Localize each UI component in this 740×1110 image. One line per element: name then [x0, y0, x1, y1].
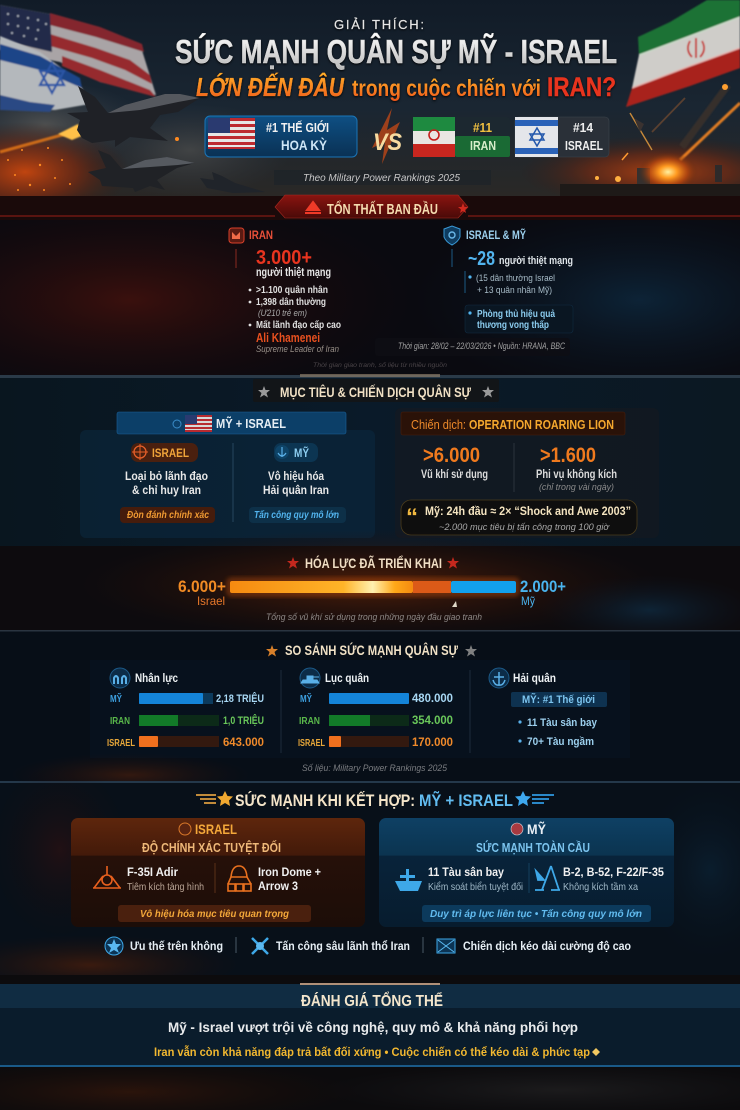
- column: Israel and US losses: (15 dân thường Israel: [476, 273, 555, 284]
- panel: navy: MỸ: #1 Thế giới: [522, 693, 595, 706]
- panel: Israel precision: ĐỘ CHÍNH XÁC TUYỆT ĐỐI: [142, 840, 281, 855]
- panel: firepower deployed: [0, 530, 740, 645]
- panel: Israel precision: Arrow 3: [258, 879, 298, 893]
- badge: Iran ranking: #11: [473, 120, 492, 135]
- column: Israel and US losses: thương vong thấp: [477, 319, 549, 331]
- caption: Số liệu: Military Power Rankings 2025: [302, 763, 448, 774]
- icon: aircraft carrier: [395, 869, 422, 891]
- column: Israel and US losses: ~28: [468, 248, 495, 270]
- panel: Israel precision: [71, 818, 365, 927]
- icon: missiles and explosion: [560, 84, 740, 196]
- heading with wings: [196, 790, 554, 810]
- heading: HÓA LỰC ĐÃ TRIỂN KHAI: [305, 556, 442, 571]
- icon: VS spark: VS: [373, 129, 402, 156]
- chart: manpower: IRAN: [110, 716, 130, 727]
- bar chart: firepower: 2.000+: [520, 577, 566, 596]
- badge: Iran ranking: [412, 117, 510, 157]
- bar chart: firepower: [178, 577, 566, 608]
- badge: Israel ranking: [515, 117, 609, 157]
- icon: fighter jet small: [200, 172, 265, 193]
- chart: ground forces: IRAN: [299, 716, 320, 727]
- callout: Shock and Awe: [401, 500, 637, 535]
- objective: Israel: ISRAEL: [152, 446, 189, 460]
- panel: US and Israel objectives: [80, 412, 375, 538]
- panel: US global power: 11 Tàu sân bay: [428, 865, 504, 879]
- panel: Israel precision: F-35I Adir: [127, 865, 178, 879]
- caption: rankings source: [274, 170, 491, 185]
- panel: US global power: B-2, B-52, F-22/F-35: [563, 865, 664, 879]
- column: Iran losses: Supreme Leader of Iran: [256, 344, 339, 354]
- objective: US: [249, 443, 346, 523]
- badge: USA ranking: HOA KỲ: [281, 136, 328, 153]
- chart: ground forces: ISRAEL: [298, 738, 325, 749]
- objective: US: Tấn công quy mô lớn: [254, 509, 339, 521]
- column: Israel and US losses: ISRAEL & MỸ: [466, 227, 526, 242]
- heading: SO SÁNH SỨC MẠNH QUÂN SỰ: [285, 641, 458, 658]
- panel: US global power: Kiểm soát biển tuyệt đối: [428, 881, 523, 893]
- panel: Operation Roaring Lion: Chiến dịch:: [411, 418, 466, 432]
- objective: Israel: [120, 443, 215, 523]
- panel: Operation Roaring Lion: OPERATION ROARING LION: [469, 418, 614, 432]
- panel: header background scene: [0, 0, 740, 222]
- heading banner: TỔN THẤT BAN ĐẦU: [327, 200, 438, 218]
- column: Iran losses: (Ư210 trẻ em): [258, 308, 307, 318]
- panel: overall assessment: Iran vẫn còn khả năng đáp trả bất đối xứng • Cuộc chiến có thể kéo dài & phức tạp: [154, 1044, 590, 1059]
- chart: ground forces: 354.000: [412, 715, 453, 727]
- icon: bomber formation: [535, 866, 560, 890]
- panel: military strength comparison: [0, 632, 740, 797]
- column: Israel and US losses: Phòng thủ hiệu quả: [477, 309, 555, 320]
- chart: manpower: ISRAEL: [107, 738, 135, 749]
- icon: F-35I: [93, 866, 121, 888]
- objective: US: Vô hiệu hóa: [268, 469, 324, 483]
- objective: Israel: Loại bỏ lãnh đạo: [125, 469, 208, 483]
- panel: overall assessment: Mỹ - Israel vượt trội về công nghệ, quy mô & khả năng phối hợp: [168, 1019, 578, 1035]
- icon: US flag waving: [0, 5, 156, 97]
- panel: Israel precision: Tiêm kích tàng hình: [127, 882, 204, 893]
- panel: Operation Roaring Lion: >6.000: [423, 444, 480, 467]
- panel: US and Israel objectives: MỸ + ISRAEL: [216, 416, 286, 431]
- title: SỨC MẠNH QUÂN SỰ MỸ - ISRAEL: [175, 33, 617, 70]
- heading: GIẢI THÍCH: GIẢI THÍCH:: [334, 17, 424, 32]
- chart: manpower: Nhân lực: [135, 671, 178, 685]
- panel: Operation Roaring Lion: >1.600: [540, 444, 596, 467]
- heading: [253, 379, 499, 402]
- column: Iran losses: người thiệt mạng: [256, 267, 331, 279]
- objective: US: MỸ: [294, 445, 309, 460]
- summary row: combined advantages: Tấn công sâu lãnh thổ Iran: [276, 939, 410, 953]
- chart: manpower: 1,0 TRIỆU: [223, 714, 264, 727]
- panel: objectives and operation: [0, 374, 740, 546]
- icon: Iran flag waving: [626, 0, 740, 107]
- panel: navy: 11 Tàu sân bay: [527, 717, 598, 729]
- column: Israel and US losses: người thiệt mạng: [499, 255, 573, 267]
- panel: Operation Roaring Lion: [395, 408, 659, 538]
- callout: Shock and Awe: Mỹ: 24h đầu ≈ 2× “Shock and Awe 2003”: [425, 504, 631, 518]
- panel: US global power: SỨC MẠNH TOÀN CẦU: [476, 840, 590, 855]
- caption: rankings source: Theo Military Power Rankings 2025: [303, 172, 460, 184]
- subtitle: [196, 72, 616, 102]
- icon: Iron Dome: [228, 866, 251, 891]
- heading banner: [275, 195, 468, 218]
- bar chart: firepower: Israel: [197, 594, 225, 608]
- heading with wings: SỨC MẠNH KHI KẾT HỢP:: [235, 791, 415, 810]
- column: Iran losses: 3.000+: [256, 247, 312, 269]
- badge: Israel ranking: #14: [573, 120, 594, 135]
- column: Iran losses: IRAN: [249, 228, 273, 242]
- panel: Israel precision: Vô hiệu hóa mục tiêu quan trọng: [140, 908, 290, 920]
- objective: Israel: Đòn đánh chính xác: [127, 510, 209, 521]
- panel: Operation Roaring Lion: Vũ khí sử dụng: [421, 469, 488, 481]
- caption: time and source: Thời gian: 28/02 – 22/03/2026 • Nguồn: HRANA, BBC: [398, 341, 565, 351]
- panel: overall assessment: ĐÁNH GIÁ TỔNG THỂ: [301, 991, 443, 1010]
- chart: ground forces: Lục quân: [325, 671, 369, 685]
- badge: USA ranking: #1 THẾ GIỚI: [266, 120, 329, 135]
- caption: Tổng số vũ khí sử dụng trong những ngày đầu giao tranh: [266, 612, 482, 623]
- panel: navy: Hải quân: [513, 671, 556, 685]
- panel: Israel precision: ISRAEL: [195, 821, 237, 837]
- chart: ground forces: [298, 668, 453, 749]
- chart: ground forces: MỸ: [300, 692, 312, 705]
- chart: ground forces: 170.000: [412, 737, 453, 749]
- summary row: combined advantages: Chiến dịch kéo dài cường độ cao: [463, 939, 631, 953]
- heading: MỤC TIÊU & CHIẾN DỊCH QUÂN SỰ: [280, 383, 471, 400]
- panel: US global power: MỸ: [527, 820, 547, 837]
- icon: VS spark: [372, 108, 402, 164]
- heading with wings: MỸ + ISRAEL: [419, 790, 513, 810]
- column: Israel and US losses: [444, 226, 573, 333]
- callout: Shock and Awe: “: [406, 504, 418, 531]
- column: Israel and US losses: + 13 quân nhân Mỹ): [477, 285, 552, 296]
- column: Iran losses: Ali Khamenei: [256, 331, 320, 345]
- subtitle: LỚN ĐẾN ĐÂU: [196, 72, 345, 102]
- chart: manpower: [107, 668, 264, 749]
- bar chart: firepower: 6.000+: [178, 577, 226, 596]
- column: Iran losses: [229, 228, 341, 354]
- caption: faint note: Thời gian giao tranh, số liệu từ nhiều nguồn: [313, 360, 447, 369]
- callout: Shock and Awe: ~2.000 mục tiêu bị tấn công trong 100 giờ: [439, 522, 610, 533]
- panel: US global power: [379, 818, 674, 927]
- objective: US: Hải quân Iran: [263, 483, 329, 497]
- column: Iran losses: Mất lãnh đạo cấp cao: [256, 319, 341, 331]
- icon: fighter jet large: [0, 86, 200, 152]
- panel: US global power: Không kích tầm xa: [563, 881, 638, 893]
- panel: combined strength: [0, 760, 740, 995]
- column: Iran losses: >1.100 quân nhân: [256, 285, 328, 296]
- icon: Israel flag waving: [0, 36, 90, 112]
- icon: fighter jet medium: [88, 150, 195, 192]
- subtitle: trong cuộc chiến với: [352, 75, 541, 101]
- panel: initial losses: [0, 190, 740, 410]
- chart: manpower: 2,18 TRIỆU: [216, 692, 264, 705]
- summary row: combined advantages: Ưu thế trên không: [130, 939, 223, 953]
- chart: manpower: 643.000: [223, 737, 264, 749]
- panel: Israel precision: Iron Dome +: [258, 865, 321, 879]
- panel: Operation Roaring Lion: (chỉ trong vài ngày): [539, 482, 614, 493]
- panel: US global power: Duy trì áp lực liên tục • Tấn công quy mô lớn: [430, 908, 642, 920]
- chart: manpower: MỸ: [110, 692, 122, 705]
- badge: Israel ranking: ISRAEL: [565, 138, 603, 153]
- column: Iran losses: 1,398 dân thường: [256, 297, 326, 308]
- summary row: combined advantages: [105, 937, 631, 955]
- panel: overall assessment: [0, 975, 740, 1110]
- subtitle: IRAN?: [547, 72, 616, 102]
- badge: Iran ranking: IRAN: [470, 138, 496, 153]
- badge: USA ranking: [205, 116, 357, 157]
- panel: navy: 70+ Tàu ngầm: [527, 736, 594, 748]
- chart: ground forces: 480.000: [412, 693, 453, 705]
- panel: Operation Roaring Lion: Phi vụ không kích: [536, 469, 617, 481]
- objective: Israel: & chỉ huy Iran: [132, 483, 201, 497]
- bar chart: firepower: Mỹ: [521, 594, 535, 608]
- panel: navy: [489, 668, 607, 748]
- caption: time and source: [375, 338, 570, 356]
